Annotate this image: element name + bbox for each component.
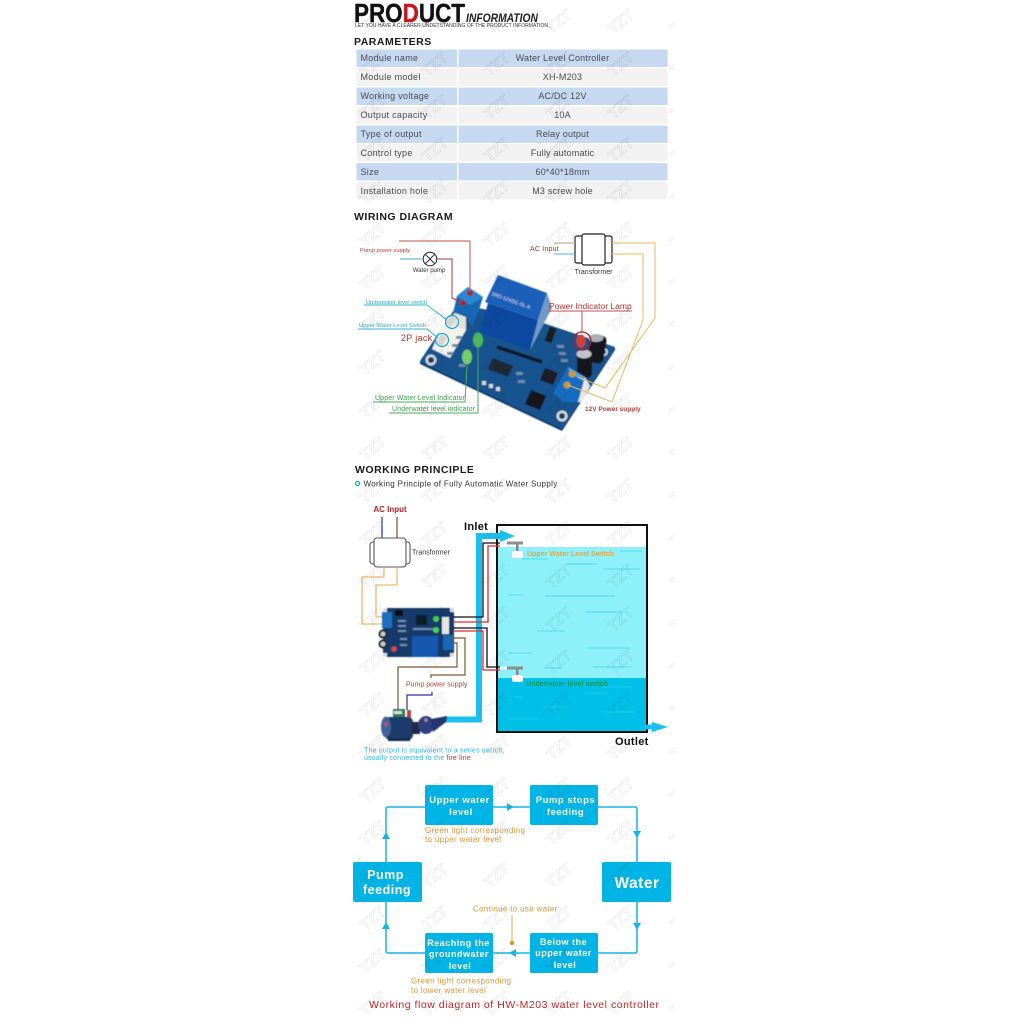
panel: parameters table: 60*40*18mm — [535, 167, 590, 177]
heading: parameters: PARAMETERS — [354, 36, 432, 48]
title: product information: LET YOU HAVE A CLEARER UNDETSTANDING OF THE PRODUCT INFORMATION — [355, 23, 548, 29]
icon: transformer — [575, 234, 612, 265]
wires: transformer to board — [362, 567, 397, 624]
photo: water pump — [381, 709, 447, 741]
icon: water pump lamp — [423, 252, 437, 266]
label: water pump: Water pump — [413, 268, 446, 274]
panel: parameters table: Working voltage — [360, 91, 429, 101]
label: pump power supply: Pump power supply — [360, 248, 410, 254]
panel: parameters table: Size — [360, 167, 379, 177]
box: pump feeding: Pump — [367, 868, 404, 882]
label: upper water level indicator: Upper Water Level Indicator — [375, 395, 466, 402]
arrow: outlet water flow — [645, 722, 668, 732]
box: pump stops feeding — [530, 785, 598, 825]
title: product information — [354, 0, 548, 29]
wires: pump power — [398, 638, 465, 710]
label: underwater level switch — [364, 300, 458, 328]
label: 2P jack: 2P jack — [401, 333, 433, 343]
label: transformer: Transformer — [412, 550, 451, 556]
box: reaching the groundwater level: groundwater — [429, 949, 489, 959]
heading: wiring diagram: WIRING DIAGRAM — [354, 211, 453, 223]
note: green light lower: to lower water level — [411, 986, 486, 995]
label: upper water level switch: Upper Water Level Switch — [359, 323, 426, 329]
panel: parameters table: Module name — [360, 53, 418, 63]
box: below the upper water level: level — [554, 960, 576, 970]
label: transformer: Transformer — [575, 269, 613, 276]
box: below the upper water level — [530, 933, 598, 973]
photo: relay controller board: SRD-12VDC-SL-A — [490, 291, 532, 311]
label: inlet: Inlet — [464, 521, 488, 533]
wires: AC input — [382, 517, 397, 539]
callout: power indicator lamp — [548, 301, 632, 350]
panel: parameters table: Output capacity — [360, 110, 428, 120]
box: below the upper water level: Below the — [540, 937, 587, 947]
label: AC input: AC Input — [373, 505, 407, 514]
icon: transformer — [370, 538, 410, 567]
icon: upper float switch — [500, 542, 523, 558]
label: outlet: Outlet — [615, 736, 649, 748]
tank: water tank — [497, 525, 647, 732]
panel: parameters table: AC/DC 12V — [538, 91, 587, 101]
panel: parameters table: Module model — [360, 72, 421, 82]
wires: AC input and 12V supply — [554, 243, 655, 402]
note: series switch output: usually connected to the fire line. — [364, 755, 473, 762]
photo: relay controller board — [420, 275, 615, 431]
box: reaching the groundwater level — [425, 933, 493, 973]
photo: controller board — [378, 608, 454, 657]
box: pump feeding — [353, 862, 422, 902]
box: pump feeding: feeding — [363, 883, 411, 897]
panel: parameters table: 10A — [554, 110, 571, 120]
caption: working flow diagram: Working flow diagram of HW-M203 water level controller — [369, 999, 660, 1011]
panel: parameters table: Control type — [360, 148, 413, 158]
box: reaching the groundwater level: level — [449, 961, 471, 971]
box: upper water level — [425, 785, 493, 825]
note: continue to use water — [473, 904, 558, 945]
panel: working principle diagram — [362, 505, 668, 762]
callout: power indicator lamp: Power Indicator Lamp — [549, 301, 632, 311]
panel: parameters table: Water Level Controller — [516, 53, 609, 63]
label: 12V power supply: 12V Power supply — [585, 406, 641, 413]
arrow: inlet water flow — [445, 530, 515, 720]
label: underwater level switch: Underwater level switch — [526, 681, 608, 688]
note: green light upper: to upper water level — [425, 835, 501, 844]
note: green light lower: Green light corresponding — [411, 976, 511, 986]
box: pump stops feeding: Pump stops — [536, 795, 595, 806]
heading: working principle: WORKING PRINCIPLE — [355, 464, 474, 476]
panel: parameters table: Installation hole — [360, 186, 428, 196]
panel: parameters table: XH-M203 — [543, 72, 582, 82]
label: underwater level indicator — [389, 347, 478, 413]
label: underwater level switch: Underwater level switch — [366, 300, 427, 306]
note: continue to use water: Continue to use water — [473, 904, 558, 914]
label: pump power supply: Pump power supply — [406, 682, 468, 688]
box: upper water level: Upper water — [429, 795, 490, 806]
note: green light upper — [425, 826, 525, 844]
label: AC input: AC Input — [530, 246, 559, 253]
flow lines and arrows — [382, 803, 641, 957]
note: green light upper: Green light corresponding — [425, 826, 525, 835]
note: series switch output — [364, 748, 505, 762]
wires: level switches — [453, 543, 500, 670]
panel: wiring diagram — [358, 234, 655, 431]
note: green light lower — [411, 976, 511, 995]
label: upper water level switch: Upper Water Level Switch — [527, 551, 614, 558]
icon: lower float switch — [500, 666, 523, 682]
panel: parameters table: Fully automatic — [531, 148, 595, 158]
subtitle: fully automatic water supply: Working Principle of Fully Automatic Water Supply — [364, 480, 558, 488]
box: water: Water — [614, 875, 660, 892]
note: series switch output: The output is equivalent to a series switch, — [364, 748, 505, 754]
panel: parameters table — [356, 50, 668, 200]
box: reaching the groundwater level: Reaching the — [427, 938, 490, 948]
box: upper water level: level — [449, 807, 473, 818]
title: product information: INFORMATION — [466, 11, 538, 25]
panel: working flow diagram — [353, 785, 671, 1011]
box: water — [602, 862, 671, 902]
label: upper water level indicator — [373, 365, 467, 402]
wires: pump power lines — [399, 241, 470, 303]
panel: parameters table: Relay output — [536, 129, 589, 139]
box: pump stops feeding: feeding — [547, 807, 584, 818]
panel: parameters table: Type of output — [360, 129, 422, 139]
box: below the upper water level: upper water — [535, 948, 592, 958]
panel: parameters table: M3 screw hole — [532, 186, 593, 196]
label: underwater level indicator: Underwater level indicator — [392, 406, 476, 413]
label: upper water level switch — [358, 323, 448, 346]
